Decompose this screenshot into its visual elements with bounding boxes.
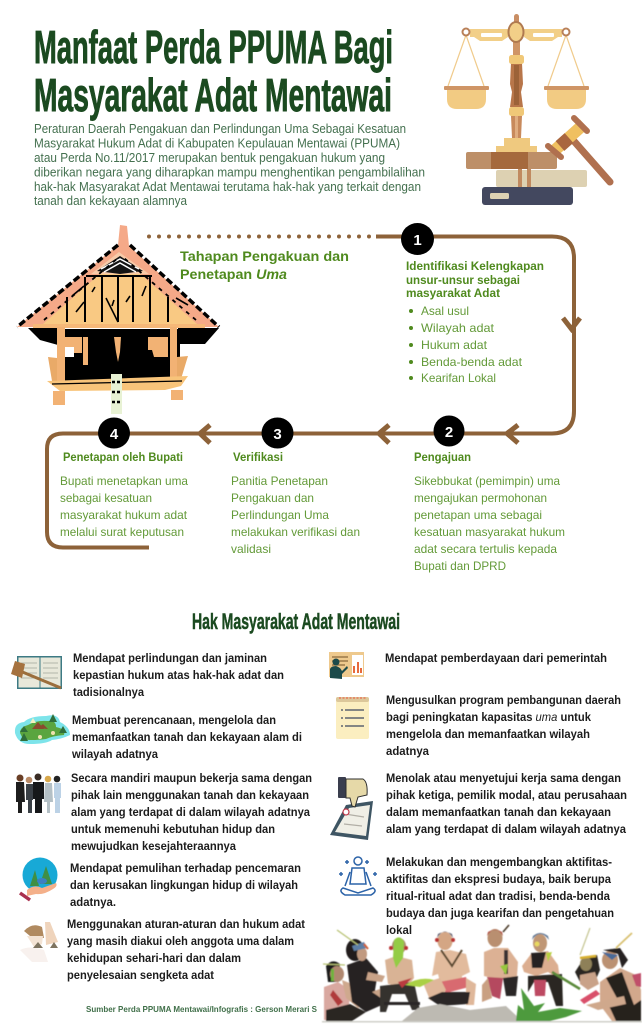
step 3 text: Perlindungan Uma bbox=[231, 508, 329, 522]
right 8 text: dalam memanfaatkan tanah dan kekayaan bbox=[386, 805, 611, 819]
dotted start of process line bbox=[149, 234, 375, 238]
plant bbox=[516, 988, 582, 1021]
process flow line bbox=[47, 236, 574, 548]
heading: hak masyarakat adat: Hak Masyarakat Adat Mentawai bbox=[192, 609, 400, 634]
icon: presentation board bbox=[329, 652, 364, 679]
icon: meditating figure bbox=[339, 857, 377, 895]
illustration: Mentawai people seated bbox=[322, 925, 642, 1022]
right 5 text: yang masih diakui oleh anggota uma dalam bbox=[67, 934, 294, 948]
icon: notepad list bbox=[336, 697, 369, 739]
step 1 text: Asal usul bbox=[421, 304, 469, 318]
step 4 text bbox=[60, 452, 188, 539]
seated figure E bbox=[482, 925, 518, 1002]
step 2 text: Pengajuan bbox=[414, 452, 471, 464]
right 5 text: Menggunakan aturan-aturan dan hukum adat bbox=[67, 917, 305, 931]
right 7 text: bagi peningkatan kapasitas uma untuk bbox=[386, 710, 591, 724]
right 6 text: Mendapat pemberdayaan dari pemerintah bbox=[385, 651, 607, 665]
step 1 text: Wilayah adat bbox=[421, 321, 495, 335]
step 4 badge bbox=[98, 418, 130, 448]
arrow: down bbox=[563, 318, 580, 329]
icon: lady justice bbox=[20, 922, 58, 962]
right 4 text: dan kerusakan lingkungan hidup di wilayah bbox=[70, 878, 298, 892]
right 2 text bbox=[71, 713, 302, 761]
right 9 text: lokal bbox=[386, 923, 412, 937]
step 2 text: mengajukan permohonan bbox=[414, 491, 547, 505]
right 7 text: mengelola dan memanfaatkan wilayah bbox=[386, 727, 590, 741]
right 7 text: adatnya bbox=[386, 744, 429, 758]
house roof bbox=[17, 225, 219, 327]
intro text block: tanah dan kekayaan alamnya bbox=[34, 194, 187, 208]
step 1 text: Identifikasi Kelengkapan bbox=[406, 261, 544, 273]
step 4 text: sebagai kesatuan bbox=[60, 491, 152, 505]
step 3 badge bbox=[262, 418, 294, 448]
right 4 text: adatnya. bbox=[70, 895, 116, 909]
step 3 text: Pengakuan dan bbox=[231, 491, 314, 505]
step 2 text: Sikebbukat (pemimpin) uma bbox=[414, 474, 560, 488]
intro text block: Masyarakat Hukum Adat di Kabupaten Kepulauan Mentawai (PPUMA) bbox=[34, 136, 400, 150]
step 1 badge: 1 bbox=[413, 232, 422, 249]
right 3 text: mewujudkan kesejahteraannya bbox=[71, 839, 236, 853]
right 8 text bbox=[386, 771, 627, 836]
step 2 text: adat secara tertulis kepada bbox=[414, 542, 557, 556]
step 2 badge: 2 bbox=[445, 424, 453, 441]
arrow: left to step 3 bbox=[379, 425, 389, 443]
right 3 text: pihak lain menggunakan tanah dan kekayaan bbox=[71, 788, 309, 802]
illustration: traditional uma house bbox=[17, 225, 219, 414]
right 2 text: wilayah adatnya bbox=[71, 747, 158, 761]
step 3 text: Verifikasi bbox=[233, 452, 283, 464]
right 2 text: memanfaatkan tanah dan kekayaan alam di bbox=[72, 730, 302, 744]
step 1 text: unsur-unsur sebagai bbox=[406, 275, 520, 287]
title: Masyarakat Adat Mentawai bbox=[34, 69, 392, 121]
icon: thumbs down and clipboard bbox=[330, 777, 373, 840]
step 3 text: validasi bbox=[231, 542, 271, 556]
right 7 text: Mengusulkan program pembangunan daerah bbox=[386, 693, 621, 707]
intro text block: hak-hak Masyarakat Adat Mentawai terutama hak-hak yang terkait dengan bbox=[34, 180, 421, 194]
right 3 text bbox=[71, 771, 312, 853]
step 2 text bbox=[414, 452, 565, 573]
title: Manfaat Perda PPUMA Bagi bbox=[34, 21, 393, 73]
step 1 text: masyarakat Adat bbox=[406, 288, 500, 300]
right 9 text: aktifitas dan ekspresi budaya, baik berupa bbox=[386, 872, 611, 886]
step 4 text: masyarakat hukum adat bbox=[60, 508, 188, 522]
right 2 text: Membuat perencanaan, mengelola dan bbox=[72, 713, 276, 727]
arrow: left to step 2 bbox=[507, 425, 518, 443]
intro text block: Peraturan Daerah Pengakuan dan Perlindungan Uma Sebagai Kesatuan bbox=[34, 122, 406, 136]
right 9 text bbox=[386, 855, 614, 937]
right 9 text: budaya dan juga kearifan dan pengetahuan bbox=[386, 906, 614, 920]
step 3 text: Panitia Penetapan bbox=[231, 474, 328, 488]
arrow: left to step 4 bbox=[200, 425, 210, 443]
source credit: Sumber Perda PPUMA Mentawai/Infografis : Gerson Merari S bbox=[86, 1004, 317, 1014]
seated figure G bbox=[575, 928, 600, 1004]
section heading: tahapan: Penetapan Uma bbox=[180, 266, 287, 282]
right 5 text: kehidupan sehari-hari dan dalam bbox=[67, 951, 241, 965]
title bbox=[34, 21, 393, 121]
right 1 text bbox=[73, 651, 284, 699]
step 3 text bbox=[231, 452, 360, 556]
seated figure F bbox=[522, 933, 563, 1006]
step 4 badge: 4 bbox=[110, 426, 119, 443]
right 7 text bbox=[386, 693, 621, 758]
right 9 text: ritual-ritual adat dan tradisi, benda-benda bbox=[386, 889, 610, 903]
right 1 text: Mendapat perlindungan dan jaminan bbox=[73, 651, 267, 665]
right 9 text: Melakukan dan mengembangkan aktifitas- bbox=[386, 855, 612, 869]
step 4 text: Penetapan oleh Bupati bbox=[63, 452, 183, 464]
step 1 text: Kearifan Lokal bbox=[421, 371, 496, 385]
step 3 badge: 3 bbox=[273, 426, 282, 443]
right 3 text: Secara mandiri maupun bekerja sama dengan bbox=[71, 771, 312, 785]
house gable bbox=[43, 256, 197, 324]
right 1 text: kepastian hukum atas hak-hak adat dan bbox=[73, 668, 284, 682]
rock bbox=[402, 1004, 522, 1021]
intro text block: diberikan negara yang diharapkan mampu menghentikan pengambilalihan bbox=[34, 166, 425, 180]
right 5 text bbox=[67, 917, 305, 982]
seated figure A bbox=[323, 961, 378, 1021]
seated figure H bbox=[586, 933, 641, 1021]
step 1 text: Benda-benda adat bbox=[421, 355, 523, 369]
right 8 text: pihak ketiga, pemilik modal, atau perusahaan bbox=[386, 788, 627, 802]
section heading: tahapan bbox=[180, 248, 349, 282]
right 8 text: Menolak atau menyetujui kerja sama dengan bbox=[386, 771, 621, 785]
icon: village map bbox=[15, 714, 70, 744]
step 2 badge bbox=[434, 416, 464, 446]
step 2 text: penetapan uma sebagai bbox=[414, 508, 542, 522]
icon: book and gavel bbox=[11, 656, 62, 689]
right 4 text: Mendapat pemulihan terhadap pencemaran bbox=[70, 861, 301, 875]
intro text block: atau Perda No.11/2017 merupakan bentuk pengakuan hukum yang bbox=[34, 151, 385, 165]
section heading: tahapan: Tahapan Pengakuan dan bbox=[180, 248, 349, 264]
step 2 text: kesatuan masyarakat hukum bbox=[414, 525, 565, 539]
right 4 text bbox=[70, 861, 301, 909]
seated figure C bbox=[380, 937, 420, 1012]
step 1 badge bbox=[401, 223, 434, 255]
right 5 text: penyelesaian sengketa adat bbox=[67, 968, 214, 982]
step 4 text: Bupati menetapkan uma bbox=[60, 474, 188, 488]
seated figure B bbox=[337, 930, 398, 1012]
icon: scales of justice with books and gavel bbox=[444, 14, 610, 205]
seated figure D bbox=[405, 932, 476, 1014]
right 3 text: untuk memenuhi kebutuhan hidup dan bbox=[71, 822, 275, 836]
right 3 text: alam yang terdapat di dalam wilayah adatnya bbox=[71, 805, 310, 819]
step 1 text bbox=[406, 261, 544, 385]
step 3 text: melakukan verifikasi dan bbox=[231, 525, 360, 539]
icon: business people bbox=[16, 774, 61, 813]
step 1 text: Hukum adat bbox=[421, 338, 488, 352]
step 2 text: Bupati dan DPRD bbox=[414, 559, 506, 573]
step 4 text: melalui surat keputusan bbox=[60, 525, 184, 539]
icon: earth in a hand bbox=[20, 858, 58, 900]
intro text block bbox=[34, 122, 425, 208]
right 8 text: alam yang terdapat di dalam wilayah adatnya bbox=[386, 822, 626, 836]
right 1 text: tadisionalnya bbox=[73, 685, 144, 699]
